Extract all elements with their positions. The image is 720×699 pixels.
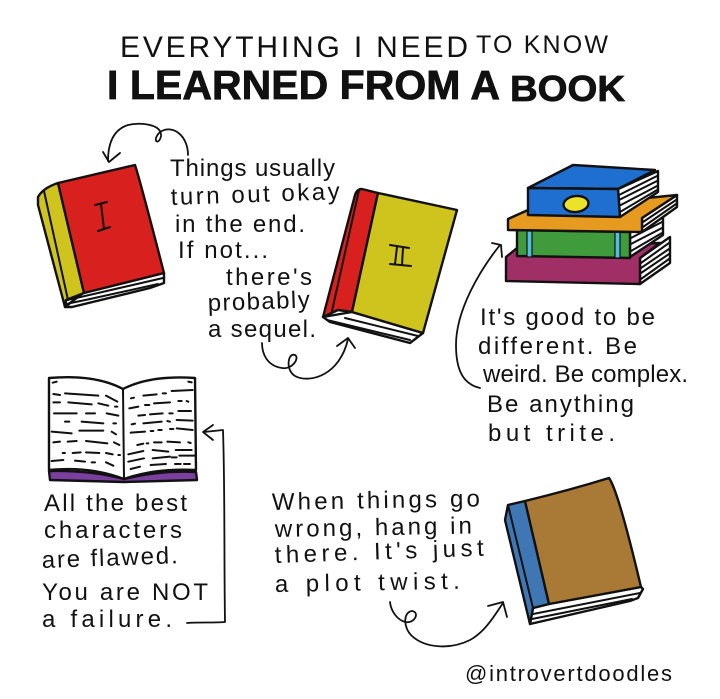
text: when things go wrong	[272, 485, 484, 598]
icon: stack of books	[506, 165, 677, 284]
text: it's good to be different: different. Be	[478, 333, 637, 360]
text: it's good to be different: but trite.	[488, 420, 615, 447]
arrow to brown book	[390, 602, 507, 646]
icon: brown book	[505, 478, 643, 624]
text: things usually turn out okay: probably	[207, 286, 310, 317]
text: all the best characters are flawed: All the best	[44, 490, 187, 517]
orange book	[642, 195, 677, 232]
text: it's good to be different	[478, 304, 688, 447]
text: it's good to be different: Be anything	[487, 391, 634, 418]
credit: @introvertdoodles: @introvertdoodles	[465, 661, 672, 686]
title line 1: TO KNOW	[476, 31, 608, 59]
title line 2: BOOK	[510, 68, 625, 109]
text: things usually turn out okay: If not...	[178, 237, 268, 264]
title	[107, 31, 625, 109]
icon: red book I	[38, 165, 164, 307]
text: all the best characters are flawed: are flawed.	[41, 542, 178, 574]
arrow to book I	[103, 124, 188, 162]
title line 2: I LEARNED FROM A	[107, 62, 500, 108]
text: things usually turn out okay: in the end.	[175, 211, 305, 238]
icon: yellow book II	[323, 189, 457, 343]
title line 1: EVERYTHING I NEED	[120, 31, 468, 64]
blue book	[618, 171, 658, 217]
text: when things go wrong: there. It's just	[274, 535, 484, 569]
text: when things go wrong: When things go	[272, 485, 480, 516]
text: things usually turn out okay: a sequel.	[208, 316, 316, 343]
text: all the best characters are flawed	[41, 490, 208, 633]
text: it's good to be different: It's good to be	[480, 304, 655, 331]
text: all the best characters are flawed: characters	[44, 517, 182, 544]
icon: open book	[49, 377, 197, 482]
green book	[630, 217, 663, 257]
arrow to open book	[187, 425, 225, 623]
arrow to stack of books	[456, 243, 502, 388]
text: all the best characters are flawed: a failure.	[42, 606, 172, 633]
text: all the best characters are flawed: You are NOT	[42, 579, 208, 606]
text: things usually turn out okay: there's	[226, 264, 312, 291]
text: it's good to be different: weird. Be complex.	[482, 361, 688, 388]
text: when things go wrong: a plot twist.	[275, 568, 460, 598]
arrow to book II	[262, 338, 355, 379]
text: when things go wrong: wrong, hang in	[274, 513, 472, 543]
text: things usually turn out okay: turn out okay	[170, 178, 340, 211]
text: things usually turn out okay: Things usually	[170, 155, 335, 182]
text: things usually turn out okay	[170, 155, 340, 343]
page text lines	[52, 382, 196, 469]
maroon book	[640, 237, 670, 284]
